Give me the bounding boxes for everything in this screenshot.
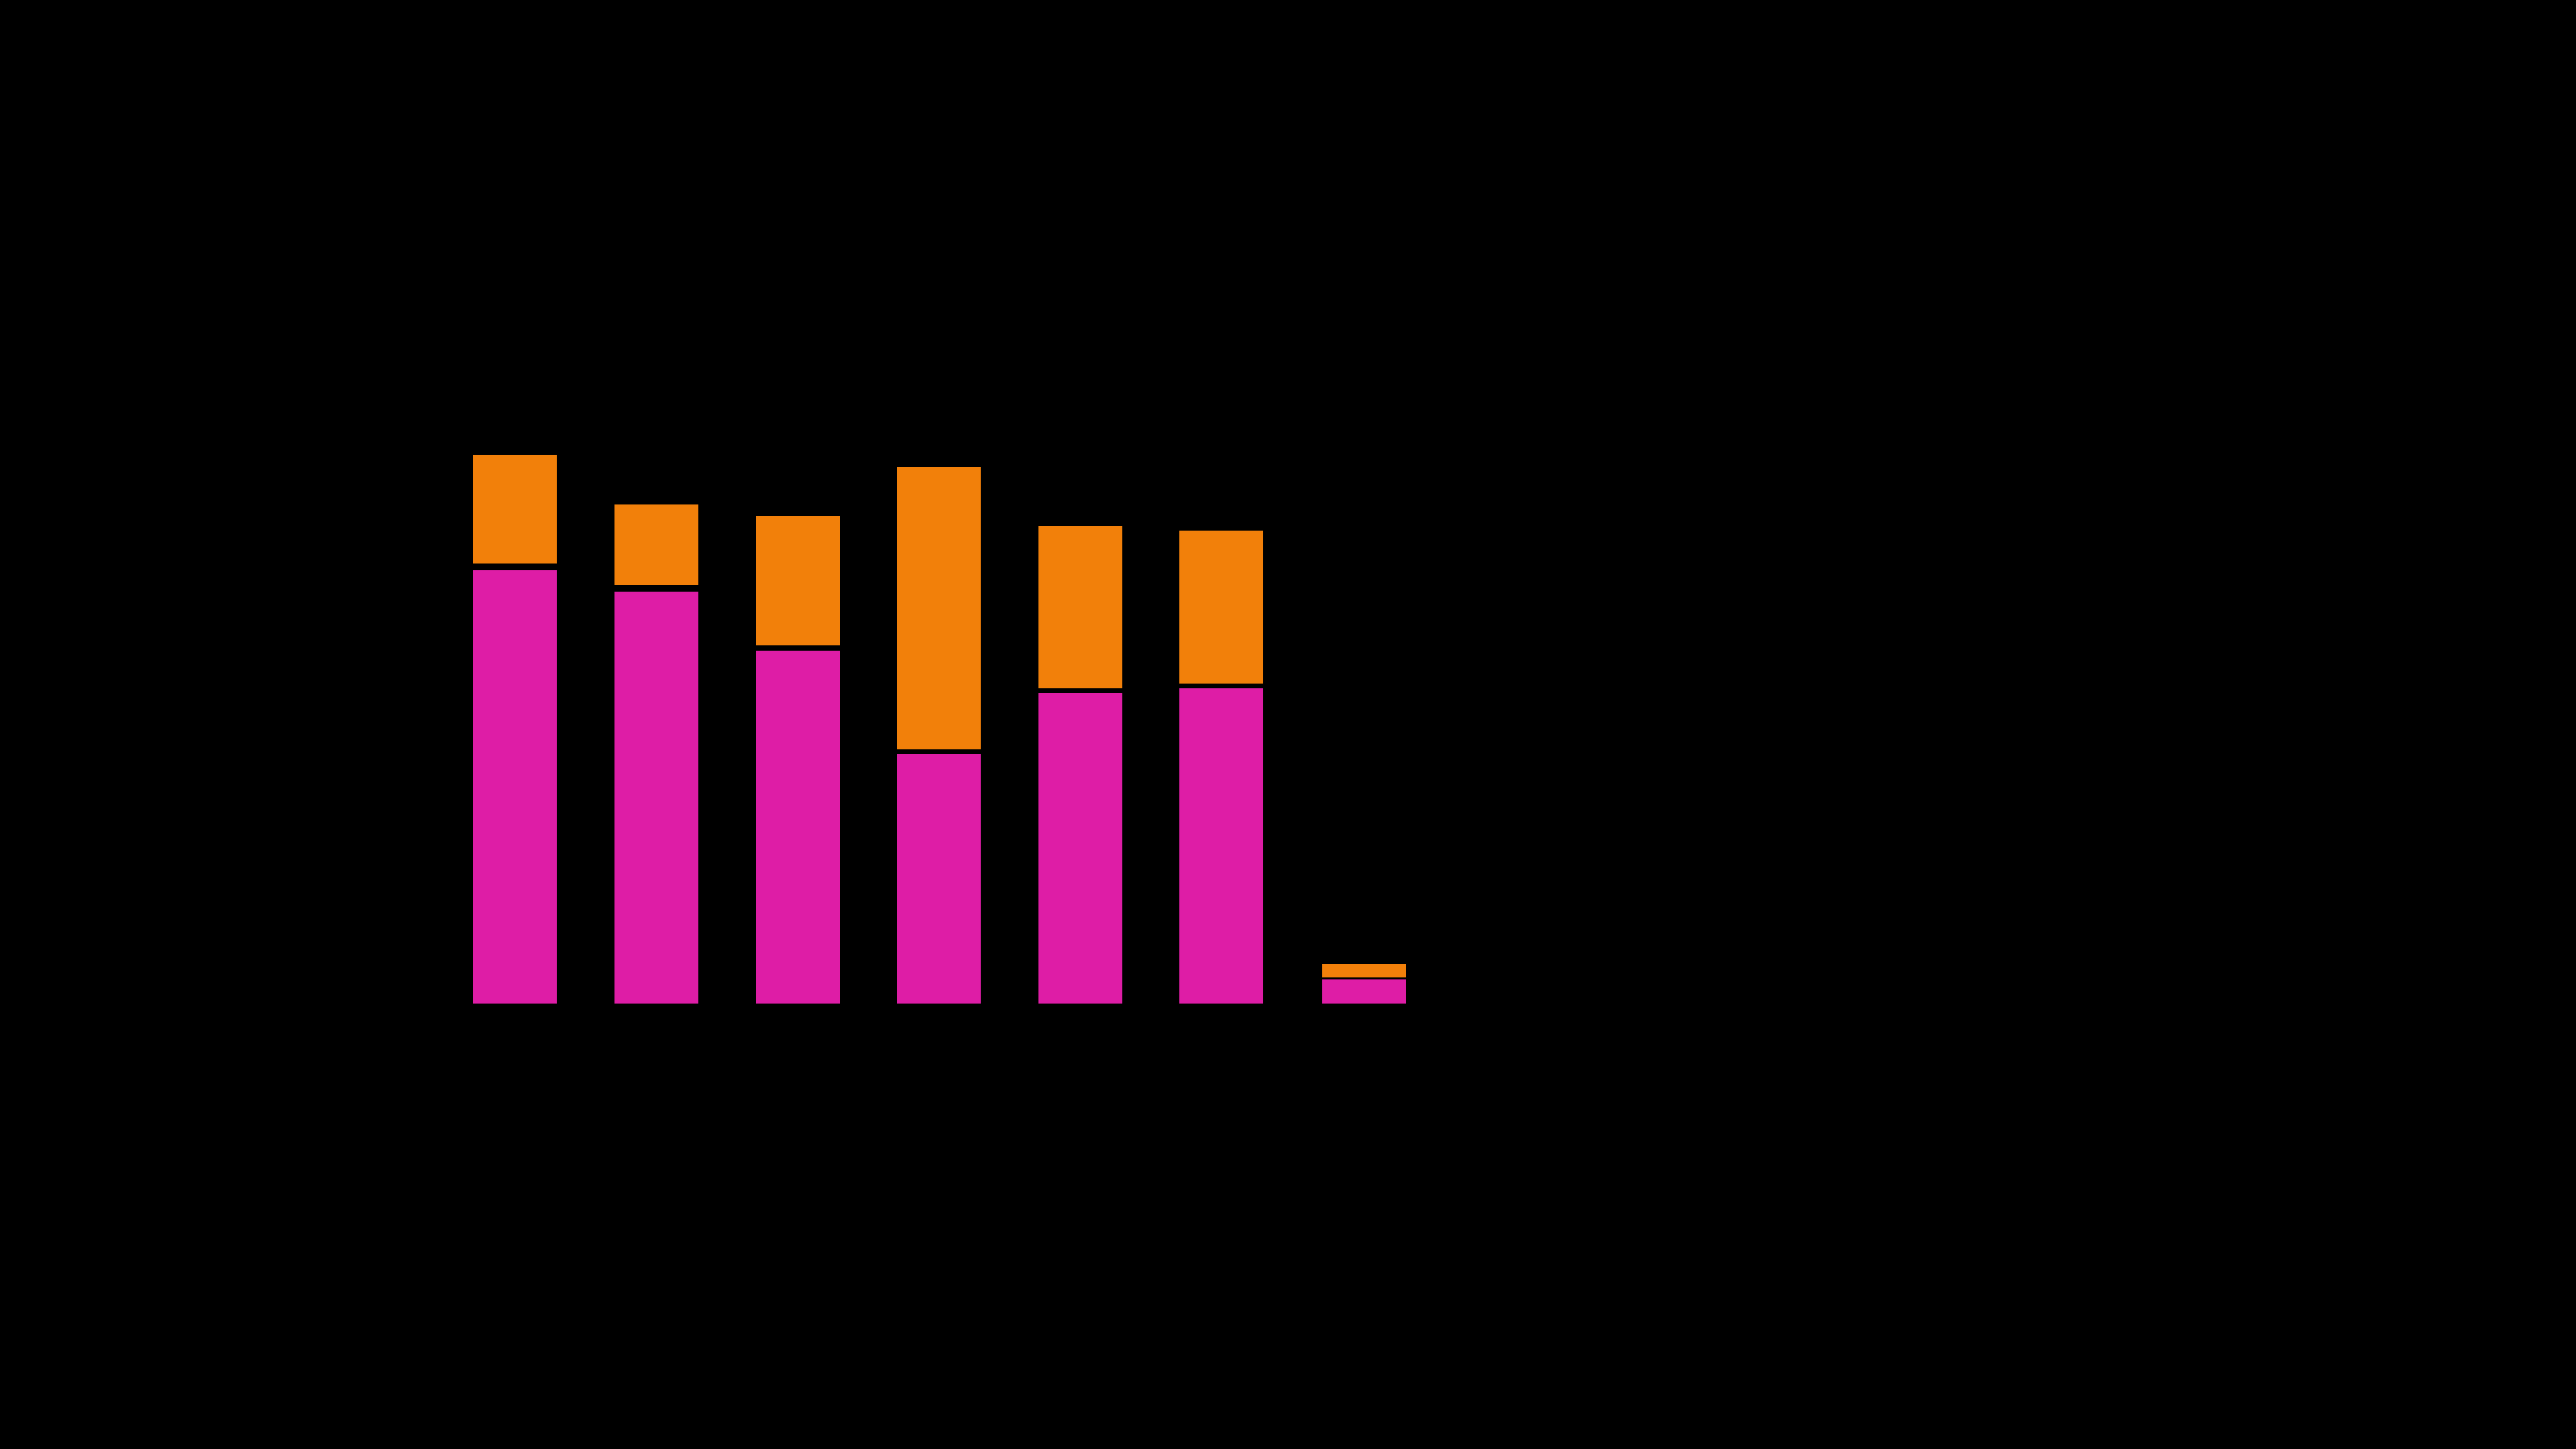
- bar 1: [473, 455, 557, 1004]
- bar 7: [1322, 964, 1406, 1004]
- bar 4: [897, 467, 981, 1004]
- bar 2: [614, 504, 698, 1004]
- bar 5: [1038, 526, 1122, 1004]
- bar 3: [756, 516, 840, 1004]
- bar 6: [1179, 531, 1263, 1004]
